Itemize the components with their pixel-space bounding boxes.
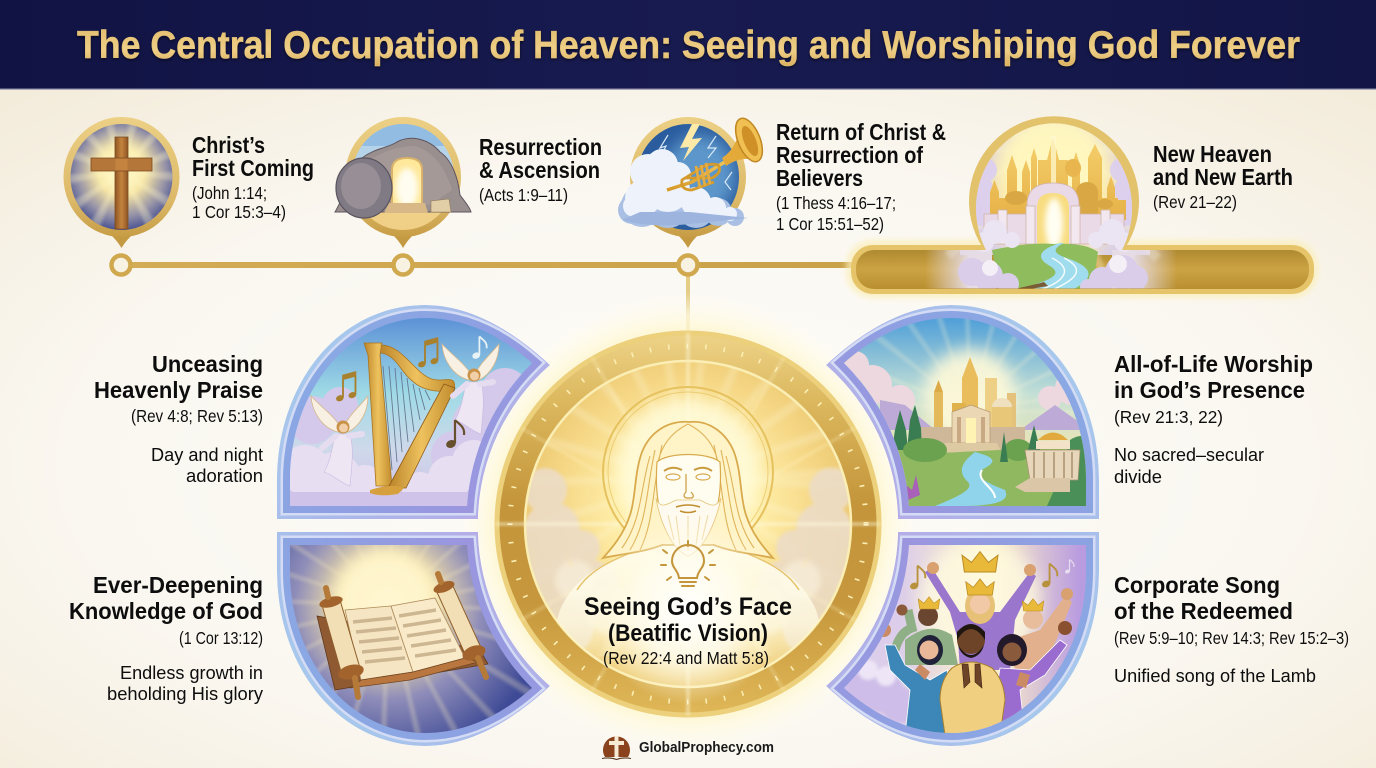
icon: logo cross bbox=[602, 736, 631, 760]
text: Ever-Deepening Knowledge of God: beholding His glory bbox=[107, 683, 264, 704]
harp bbox=[364, 343, 455, 495]
halo bbox=[603, 387, 773, 557]
text: New Heaven and New Earth bbox=[1153, 141, 1293, 212]
text: Unceasing Heavenly Praise: Heavenly Praise bbox=[94, 377, 263, 403]
timeline node 1 bbox=[112, 256, 130, 274]
inner disc with rays and clouds bbox=[496, 333, 880, 715]
angels bbox=[311, 396, 368, 486]
icon: empty tomb pin bbox=[335, 117, 471, 248]
trumpet bbox=[667, 115, 768, 190]
text: New Heaven and New Earth: (Rev 21–22) bbox=[1153, 192, 1237, 212]
text: Christ's First Coming: Christ’s bbox=[192, 132, 265, 158]
clouds bbox=[618, 149, 748, 228]
text: Corporate Song of the Redeemed: Corporate Song bbox=[1114, 572, 1280, 598]
open book and scrolls bbox=[317, 574, 488, 697]
text: Resurrection and Ascension: (Acts 1:9–11) bbox=[479, 185, 568, 205]
text: All-of-Life Worship: No sacred–secular bbox=[1114, 444, 1264, 465]
logo: GlobalProphecy.com bbox=[639, 740, 774, 756]
panel: seeing God's face bbox=[496, 333, 880, 715]
central glow bbox=[456, 292, 920, 756]
land and river bbox=[992, 244, 1098, 290]
text: New Heaven and New Earth: New Heaven bbox=[1153, 141, 1272, 167]
logo bbox=[602, 736, 774, 760]
text: Ever-Deepening Knowledge of God: Endless growth in bbox=[120, 662, 263, 683]
center heading bbox=[584, 593, 792, 668]
crown bbox=[962, 552, 998, 572]
music notes bbox=[909, 560, 1074, 590]
text: Unceasing Heavenly Praise: (Rev 4:8; Rev 5:13) bbox=[131, 406, 263, 426]
icon: light bulb bbox=[661, 541, 715, 586]
icon: cross pin bbox=[64, 117, 180, 248]
text: New Heaven and New Earth: and New Earth bbox=[1153, 164, 1293, 190]
panel: heavenly praise illustration bbox=[277, 305, 550, 519]
back row singers bbox=[895, 562, 1073, 670]
landscape bbox=[894, 405, 1086, 506]
text: Return of Christ: (1 Thess 4:16–17; bbox=[776, 193, 896, 213]
timeline node 3 bbox=[678, 256, 698, 274]
text: Resurrection and Ascension: Resurrection bbox=[479, 134, 602, 160]
title: The Central Occupation of Heaven: Seeing and Worshiping God Forever bbox=[77, 24, 1300, 67]
front row singers bbox=[877, 621, 1072, 735]
icon: trumpet and clouds pin bbox=[618, 115, 768, 248]
text: All-of-Life Worship: All-of-Life Worship bbox=[1114, 351, 1313, 377]
panel: corporate song illustration bbox=[826, 532, 1099, 746]
text: Unceasing Heavenly Praise: Day and night bbox=[151, 444, 263, 465]
text: Return of Christ: Resurrection of bbox=[776, 142, 923, 168]
text: All-of-Life Worship: divide bbox=[1114, 466, 1162, 487]
text: Unceasing Heavenly Praise bbox=[94, 351, 263, 486]
text: Ever-Deepening Knowledge of God: Ever-Deepening bbox=[93, 572, 263, 598]
text: Ever-Deepening Knowledge of God: Knowledge of God bbox=[69, 598, 263, 624]
text: Resurrection and Ascension: & Ascension bbox=[479, 157, 600, 183]
text: Christ's First Coming: (John 1:14; bbox=[192, 183, 267, 203]
music notes bbox=[335, 336, 487, 449]
timeline node 2 bbox=[394, 256, 412, 274]
icon: new Jerusalem city bbox=[927, 116, 1175, 288]
text: Ever-Deepening Knowledge of God: (1 Cor 13:12) bbox=[179, 628, 263, 648]
text: Ever-Deepening Knowledge of God bbox=[69, 572, 264, 704]
panel: knowledge of God illustration bbox=[277, 532, 550, 746]
text: Unceasing Heavenly Praise: Unceasing bbox=[152, 351, 263, 377]
text: Resurrection and Ascension bbox=[479, 134, 602, 205]
center heading: Seeing God’s Face bbox=[584, 593, 792, 621]
text: Corporate Song of the Redeemed bbox=[1114, 572, 1349, 686]
text: Corporate Song of the Redeemed: of the Redeemed bbox=[1114, 598, 1293, 624]
timeline line bbox=[121, 262, 861, 334]
figure of Christ bbox=[557, 420, 819, 679]
center heading: (Rev 22:4 and Matt 5:8) bbox=[603, 648, 769, 668]
text: Christ's First Coming: First Coming bbox=[192, 155, 314, 181]
text: All-of-Life Worship: in God’s Presence bbox=[1114, 377, 1305, 403]
text: Unceasing Heavenly Praise: adoration bbox=[186, 465, 263, 486]
text: Christ's First Coming bbox=[192, 132, 314, 222]
panel: all-of-life worship illustration bbox=[826, 300, 1100, 520]
center heading: (Beatific Vision) bbox=[608, 620, 768, 647]
text: Christ's First Coming: 1 Cor 15:3–4) bbox=[192, 202, 286, 222]
golden bar: eternal state bbox=[846, 240, 1318, 298]
text: Corporate Song of the Redeemed: Unified song of the Lamb bbox=[1114, 665, 1316, 686]
header banner bbox=[0, 0, 1376, 90]
text: Return of Christ bbox=[776, 119, 946, 234]
text: Return of Christ: Return of Christ & bbox=[776, 119, 946, 145]
golden city bbox=[915, 357, 1025, 455]
gold ring bbox=[497, 333, 879, 715]
text: Return of Christ: 1 Cor 15:51–52) bbox=[776, 214, 884, 234]
text: All-of-Life Worship bbox=[1114, 351, 1313, 487]
text: Return of Christ: Believers bbox=[776, 165, 863, 191]
text: All-of-Life Worship: (Rev 21:3, 22) bbox=[1114, 407, 1223, 427]
